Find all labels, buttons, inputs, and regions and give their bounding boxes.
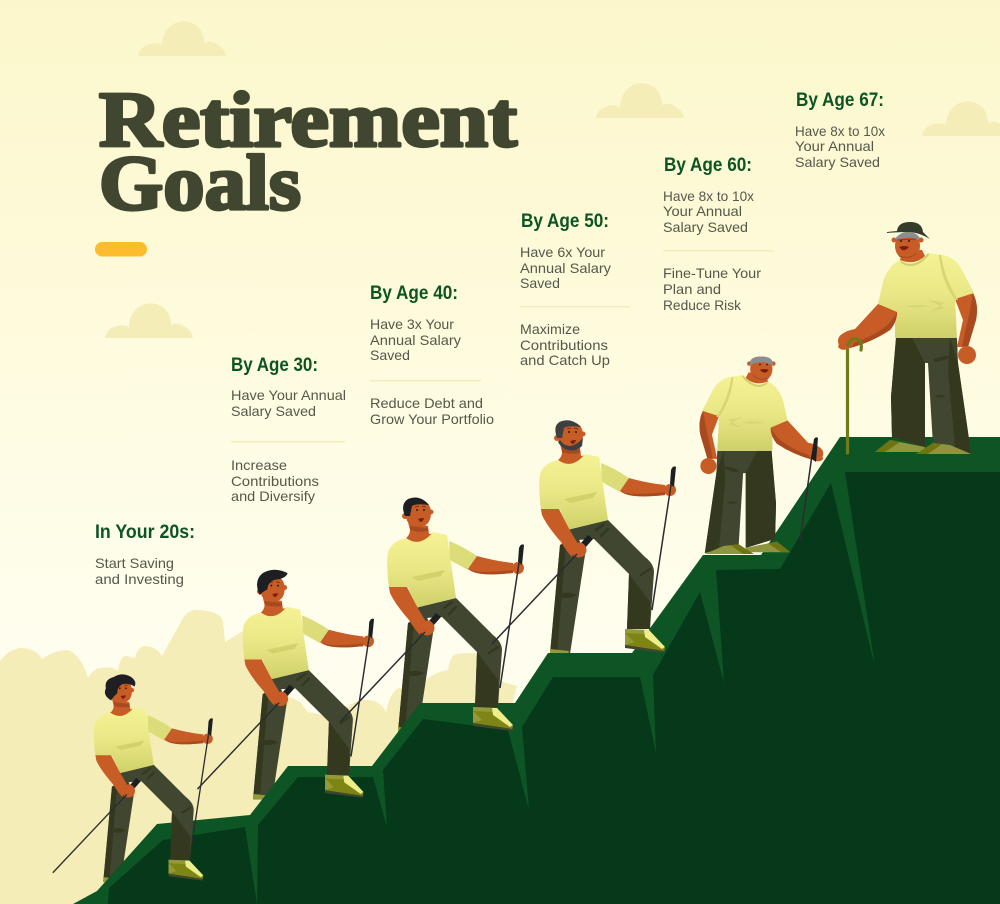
- text block: by age 67: Your Annual: [795, 138, 874, 154]
- text block: by age 60: Have 8x to 10x: [663, 188, 754, 204]
- text block: by age 30: Have Your Annual: [231, 387, 346, 403]
- text block: by age 40: Reduce Debt and: [370, 395, 483, 411]
- accent pill: [95, 242, 147, 256]
- text block: by age 60: Plan and: [663, 281, 721, 297]
- text block: by age 50: and Catch Up: [520, 352, 610, 368]
- text block: by age 30: Contributions: [231, 473, 319, 489]
- hair: curly: [105, 674, 135, 700]
- text block: by age 40: Grow Your Portfolio: [370, 411, 494, 427]
- hiker: by age 67: [838, 222, 977, 454]
- text block: by age 60: By Age 60:: [664, 155, 752, 176]
- text block: by age 67: By Age 67:: [796, 90, 884, 111]
- hair: grey: [750, 356, 773, 365]
- text block: by age 60: Reduce Risk: [663, 297, 742, 313]
- text block: by age 40: Saved: [370, 347, 410, 363]
- trekking pole: by age 60: [800, 437, 818, 541]
- text block: by age 67: [795, 90, 885, 170]
- text block: in your 20s: In Your 20s:: [95, 522, 195, 543]
- text block: by age 40: [370, 283, 494, 427]
- cloud bank behind mountain: [0, 610, 517, 904]
- back legs of hikers (behind mountain): [103, 534, 585, 882]
- text block: by age 30: By Age 30:: [231, 355, 318, 376]
- cloud: left middle: [105, 303, 193, 338]
- text block: by age 50: Contributions: [520, 337, 608, 353]
- title line: Goals: Goals: [99, 139, 301, 226]
- text block: by age 40: Annual Salary: [370, 332, 461, 348]
- cloud: right edge: [922, 101, 1000, 136]
- mountain: [73, 437, 1000, 904]
- hair and beard: [555, 420, 583, 450]
- text block: by age 50: Maximize: [520, 321, 580, 337]
- text block: by age 40: Have 3x Your: [370, 316, 454, 332]
- mountain: light ridge: [73, 437, 1000, 904]
- text block: by age 50: Have 6x Your: [520, 244, 605, 260]
- cloud: top centre-left: [138, 21, 226, 56]
- hair: short: [403, 497, 429, 516]
- text block: by age 67: Have 8x to 10x: [795, 123, 885, 139]
- title: [99, 76, 517, 226]
- hat: [887, 222, 930, 239]
- text block: by age 67: Salary Saved: [795, 154, 880, 170]
- hiker: by age 50: [492, 420, 676, 653]
- cloud: top centre: [596, 83, 684, 118]
- hiker: by age 40: [340, 497, 524, 731]
- text block: by age 30: Increase: [231, 457, 287, 473]
- cane: [848, 339, 861, 453]
- text block: by age 50: Saved: [520, 275, 560, 291]
- grey hair: [895, 232, 920, 240]
- text block: by age 30: Salary Saved: [231, 403, 316, 419]
- text block: in your 20s: and Investing: [95, 571, 184, 587]
- text block: by age 60: Fine-Tune Your: [663, 265, 761, 281]
- hair: quiff: [257, 570, 288, 595]
- glasses: [897, 239, 916, 240]
- text block: by age 50: By Age 50:: [521, 211, 609, 232]
- text block: in your 20s: [95, 522, 195, 587]
- text block: by age 60: Your Annual: [663, 203, 742, 219]
- hiker: in your 20s: [53, 674, 213, 881]
- text block: by age 30: and Diversify: [231, 488, 315, 504]
- text block: by age 50: [520, 211, 630, 368]
- hiker: by age 30: [197, 570, 374, 798]
- text block: by age 60: [663, 155, 773, 313]
- hiker: by age 60: [699, 356, 823, 554]
- text block: by age 50: Annual Salary: [520, 260, 611, 276]
- text block: in your 20s: Start Saving: [95, 555, 174, 571]
- text block: by age 40: By Age 40:: [370, 283, 458, 304]
- title line: Retirement: Retirement: [99, 76, 517, 163]
- text block: by age 60: Salary Saved: [663, 219, 748, 235]
- text block: by age 30: [231, 355, 346, 504]
- mountain: dark face: [108, 472, 1000, 904]
